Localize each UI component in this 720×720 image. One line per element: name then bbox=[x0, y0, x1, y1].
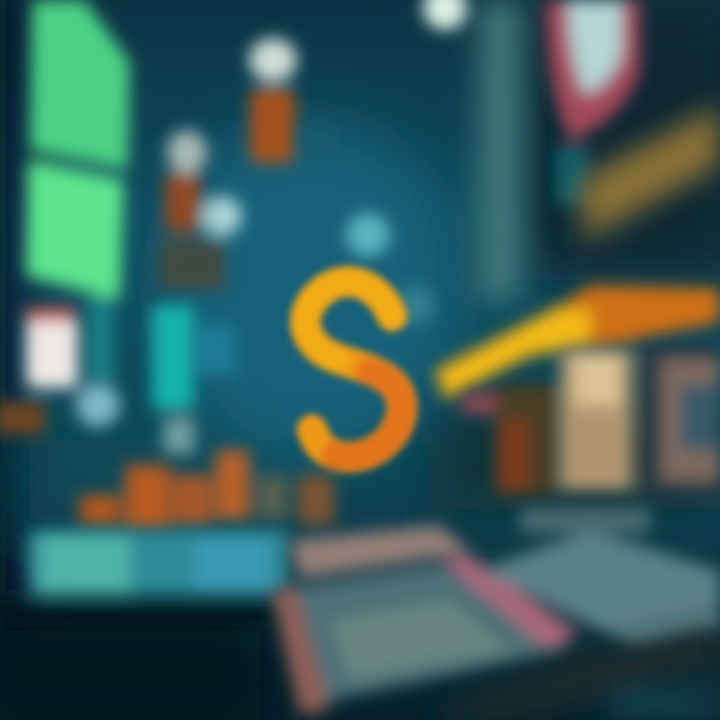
table edge bbox=[420, 625, 720, 720]
shop front bbox=[462, 345, 720, 495]
striped round sign bbox=[546, 0, 640, 205]
glowing blue lights bbox=[195, 125, 435, 375]
orange bars chart bbox=[80, 450, 334, 530]
street lamp: top centre bbox=[423, 0, 467, 30]
neon green billboard bbox=[26, 0, 130, 385]
white and red sign bbox=[0, 308, 120, 434]
dollar sign bbox=[305, 282, 402, 457]
papers on the table bbox=[272, 508, 720, 715]
blurred ledge in front bbox=[0, 530, 288, 622]
golden shop sign bbox=[578, 105, 720, 240]
tower in the background bbox=[478, 0, 555, 300]
teal column bbox=[152, 305, 195, 454]
amber bottle lamp bbox=[249, 38, 297, 163]
orange awning bbox=[435, 285, 720, 400]
small amber bottle lamp bbox=[160, 130, 242, 290]
